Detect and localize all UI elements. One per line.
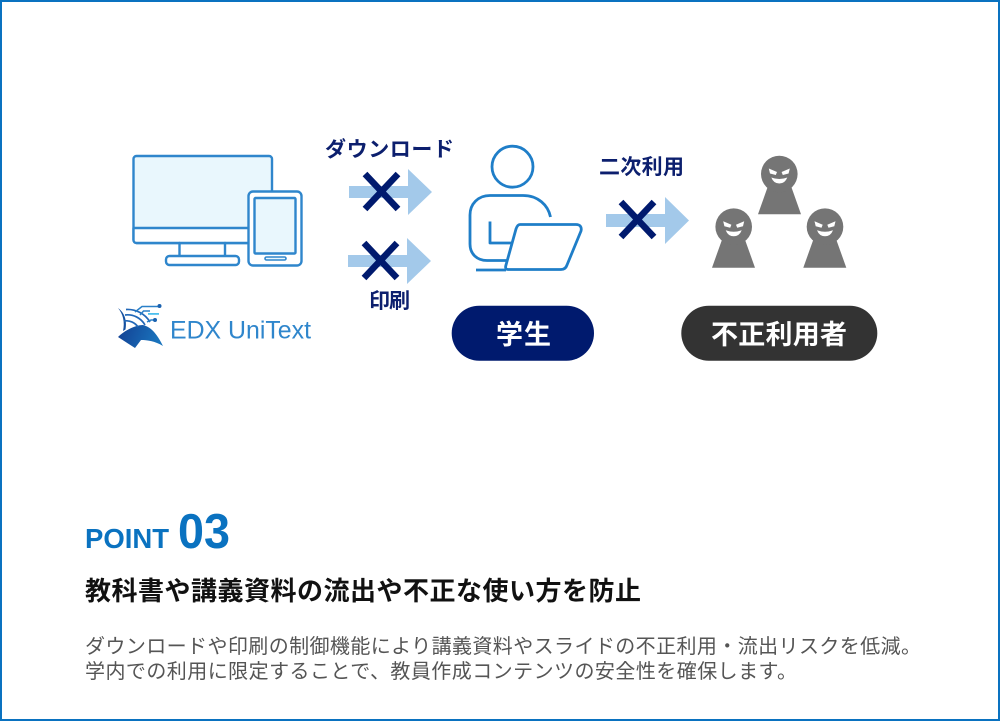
heading: POINT 03: POINT xyxy=(85,523,169,554)
arrow: secondary use blocked xyxy=(606,197,689,244)
subheading: 教科書や講義資料の流出や不正な使い方を防止 xyxy=(85,571,641,608)
icon: unauthorized user left xyxy=(712,208,755,268)
arrow: download blocked xyxy=(349,169,432,215)
pill: unauthorized user xyxy=(681,306,877,361)
icon: student with laptop xyxy=(470,146,581,270)
label: download: ダウンロード xyxy=(325,134,454,164)
pill: unauthorized user: 不正利用者 xyxy=(711,313,847,352)
body text: 学内での利用に限定することで、教員作成コンテンツの安全性を確保します。 xyxy=(85,655,797,684)
icon: logo mark xyxy=(118,304,163,348)
icon: unauthorized user top xyxy=(758,156,801,214)
arrow: print blocked xyxy=(348,238,431,284)
logo wordmark: EDX UniText xyxy=(170,316,311,344)
icon: unauthorized user right xyxy=(803,208,846,268)
heading: POINT 03: 03 xyxy=(178,505,230,559)
label: print: 印刷 xyxy=(369,285,410,315)
pill: student xyxy=(452,306,594,361)
label: secondary use: 二次利用 xyxy=(599,151,684,181)
body text xyxy=(85,630,921,684)
logo: EDX UniText xyxy=(118,304,311,348)
pill: student: 学生 xyxy=(496,313,551,352)
body text: ダウンロードや印刷の制御機能により講義資料やスライドの不正利用・流出リスクを低減。 xyxy=(85,630,921,659)
heading: POINT 03 xyxy=(85,505,230,559)
icon: monitor and tablet xyxy=(134,156,302,266)
